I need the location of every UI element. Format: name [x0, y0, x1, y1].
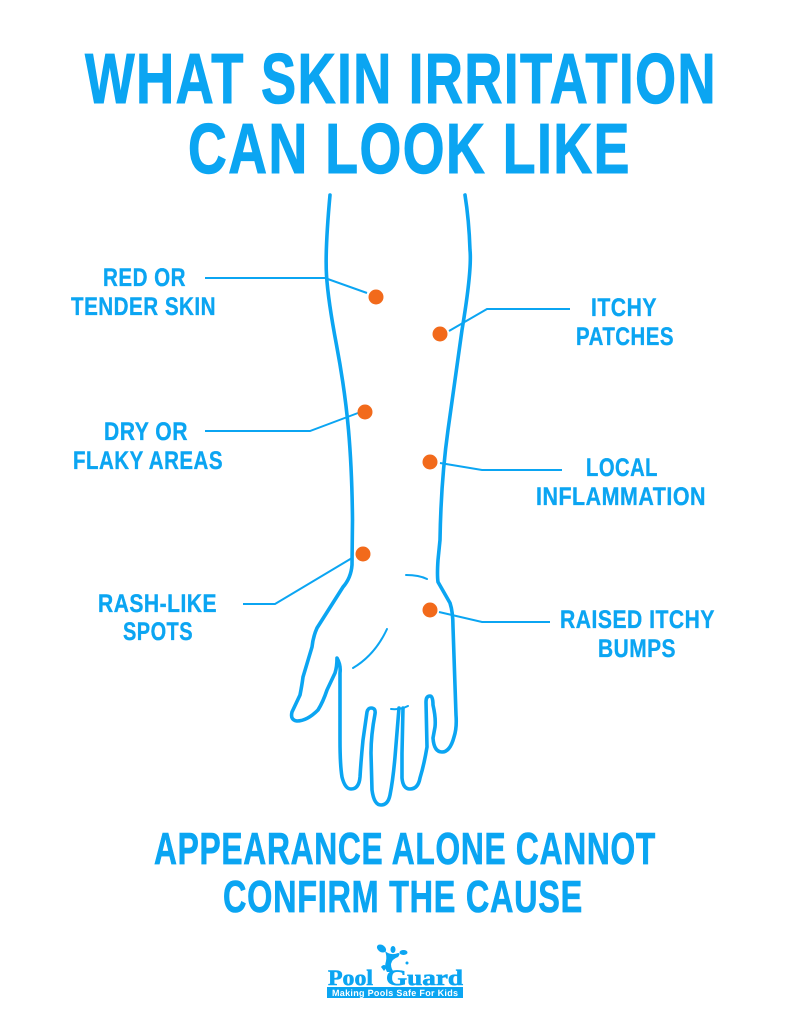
leader and marker: itchy patches — [432, 309, 570, 342]
label: rash-like spots: RASH-LIKE — [98, 590, 217, 618]
label: local inflammation: INFLAMMATION — [536, 483, 706, 511]
label: dry or flaky areas: DRY OR — [104, 418, 188, 446]
label: local inflammation — [536, 454, 706, 511]
label: itchy patches — [576, 294, 674, 351]
label: raised itchy bumps — [560, 606, 715, 663]
label: dry or flaky areas: FLAKY AREAS — [73, 447, 223, 475]
label: itchy patches: ITCHY — [591, 294, 657, 322]
leader and marker: rash-like spots — [243, 546, 370, 604]
leader and marker: dry or flaky areas — [205, 404, 372, 431]
logo: Pool Guard: Pool — [328, 965, 373, 990]
label: rash-like spots: SPOTS — [123, 618, 193, 646]
logo: Pool Guard: Guard — [386, 965, 463, 990]
title — [85, 40, 717, 189]
closing statement — [154, 823, 656, 922]
label: local inflammation: LOCAL — [586, 454, 658, 482]
arm and hand outline — [292, 195, 470, 805]
label: itchy patches: PATCHES — [576, 323, 674, 351]
label: rash-like spots — [98, 590, 217, 646]
leader and marker: raised itchy bumps — [422, 602, 550, 622]
label: raised itchy bumps: BUMPS — [598, 635, 676, 663]
label: red or tender skin: TENDER SKIN — [71, 293, 216, 321]
label: dry or flaky areas — [73, 418, 223, 475]
leader and marker: red or tender skin — [205, 278, 384, 304]
title: CAN LOOK LIKE — [188, 110, 631, 189]
logo: Pool Guard — [327, 943, 463, 998]
label: raised itchy bumps: RAISED ITCHY — [560, 606, 715, 634]
leader and marker: local inflammation — [422, 454, 562, 470]
label: red or tender skin — [71, 264, 216, 321]
icon: water splash — [375, 943, 408, 972]
closing statement: CONFIRM THE CAUSE — [223, 871, 583, 922]
logo: Pool Guard: Making Pools Safe For Kids — [332, 988, 458, 998]
label: red or tender skin: RED OR — [103, 264, 186, 292]
